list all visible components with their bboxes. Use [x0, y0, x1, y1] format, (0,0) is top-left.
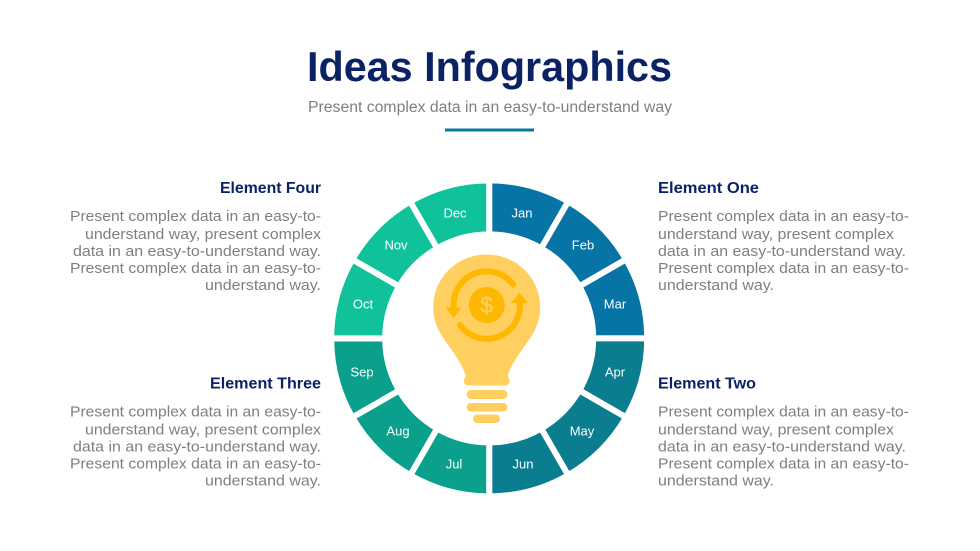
month labels: Apr: [605, 364, 626, 380]
month labels: Oct: [353, 296, 373, 312]
month labels: Sep: [350, 364, 374, 380]
heading: element two: Element Two: [658, 376, 756, 392]
text block: element three: data in an easy-to-understand way.: [73, 440, 321, 456]
text block: element two: understand way.: [658, 474, 774, 490]
text block: element three: understand way, present complex: [85, 422, 322, 438]
month ring chart: [313, 162, 666, 515]
text block: element three: Present complex data in an easy-to-: [70, 456, 321, 472]
text block: element three: [70, 404, 322, 490]
arrow heads: [446, 292, 528, 318]
text block: element one: [658, 209, 909, 294]
month labels: [350, 206, 627, 472]
heading: element one: Element One: [658, 180, 759, 197]
circular arrows: [454, 271, 520, 339]
month labels: Mar: [604, 296, 627, 312]
text block: element one: Present complex data in an easy-to-: [658, 209, 909, 225]
icon: light bulb with dollar: [433, 254, 540, 423]
title: Ideas Infographics: [307, 43, 672, 90]
text block: element four: data in an easy-to-understand way.: [73, 244, 321, 260]
text block: element three: Present complex data in an easy-to-: [70, 404, 321, 420]
panel: element three: [70, 376, 322, 490]
text block: element two: data in an easy-to-understand way.: [658, 440, 906, 456]
month labels: Jul: [446, 456, 462, 472]
text block: element four: understand way, present complex: [85, 227, 322, 243]
text block: element four: Present complex data in an easy-to-: [70, 209, 321, 225]
heading: element four: Element Four: [220, 180, 321, 197]
text block: element four: understand way.: [205, 278, 321, 294]
panel: element four: [70, 180, 322, 294]
heading: element three: Element Three: [210, 376, 321, 392]
text block: element one: data in an easy-to-understand way.: [658, 244, 906, 260]
text block: element two: Present complex data in an easy-to-: [658, 404, 909, 420]
month labels: Aug: [386, 424, 410, 438]
panel: element one: [658, 180, 909, 294]
month labels: Dec: [443, 206, 467, 220]
text block: element four: Present complex data in an easy-to-: [70, 261, 321, 277]
bulb base stripes: [466, 390, 508, 423]
month labels: Jun: [513, 456, 533, 472]
text block: element three: understand way.: [205, 474, 321, 490]
text block: element two: [658, 404, 909, 490]
text block: element four: [70, 209, 322, 294]
text block: element one: Present complex data in an easy-to-: [658, 261, 909, 277]
ring segments: [313, 162, 666, 515]
month labels: Jan: [512, 206, 532, 220]
month labels: Nov: [384, 238, 408, 252]
month labels: May: [570, 424, 595, 438]
text block: element one: understand way.: [658, 278, 774, 294]
subtitle: Present complex data in an easy-to-understand way: [308, 99, 672, 116]
bulb body: [433, 254, 540, 386]
title underline: [445, 128, 534, 132]
panel: element two: [658, 376, 909, 490]
dollar coin: [469, 287, 505, 323]
text block: element two: Present complex data in an easy-to-: [658, 456, 909, 472]
text block: element two: understand way, present complex: [658, 422, 895, 438]
text block: element one: understand way, present complex: [658, 227, 895, 243]
dollar sign: $: [480, 292, 493, 318]
month labels: Feb: [572, 238, 594, 252]
